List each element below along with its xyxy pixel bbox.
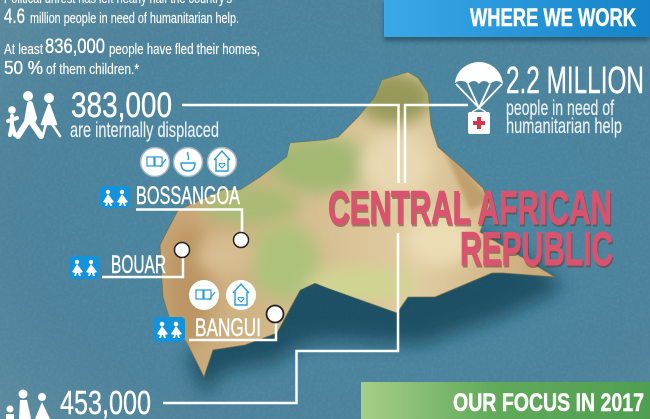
stat: 383,000 internally displaced: are internally displaced [70,119,219,142]
map of Central African Republic [160,72,562,395]
location: Bangui: BANGUI [195,314,261,342]
location: Bossangoa: BOSSANGOA [136,182,240,210]
location: Bossangoa [100,148,248,248]
icon: parachute with aid box [455,62,503,134]
stat: 383,000 internally displaced: 383,000 [71,86,172,125]
header: our focus in 2017 [361,382,650,419]
intro text block: million people in need of humanitarian help. [30,10,239,27]
icon: family walking [8,91,60,136]
icon: Bangui services [189,280,256,310]
intro text block: 4.6 [4,5,25,28]
intro text block: people have fled their homes, [109,41,260,58]
stat: 2.2 million [506,60,644,138]
intro text block: 836,000 [45,35,105,58]
icon: Save the Children logo [100,186,130,208]
title: Central African Republic [328,181,614,277]
stat: 383,000 internally displaced [70,86,219,142]
location: Bouar: BOUAR [111,251,166,279]
intro text block: At least [4,41,44,58]
icon: family walking, lower [6,390,50,419]
connector lines [163,105,468,403]
icon: Save the Children logo [69,256,99,279]
intro text block: of them children.* [46,61,139,78]
icon: Bossangoa services [140,148,236,176]
icon: Save the Children logo [153,317,185,342]
location: Bouar [69,242,190,279]
location: Bangui [153,280,284,342]
header: where we work [384,0,650,41]
intro text block: 50 % [4,58,43,78]
intro text block [4,0,260,78]
